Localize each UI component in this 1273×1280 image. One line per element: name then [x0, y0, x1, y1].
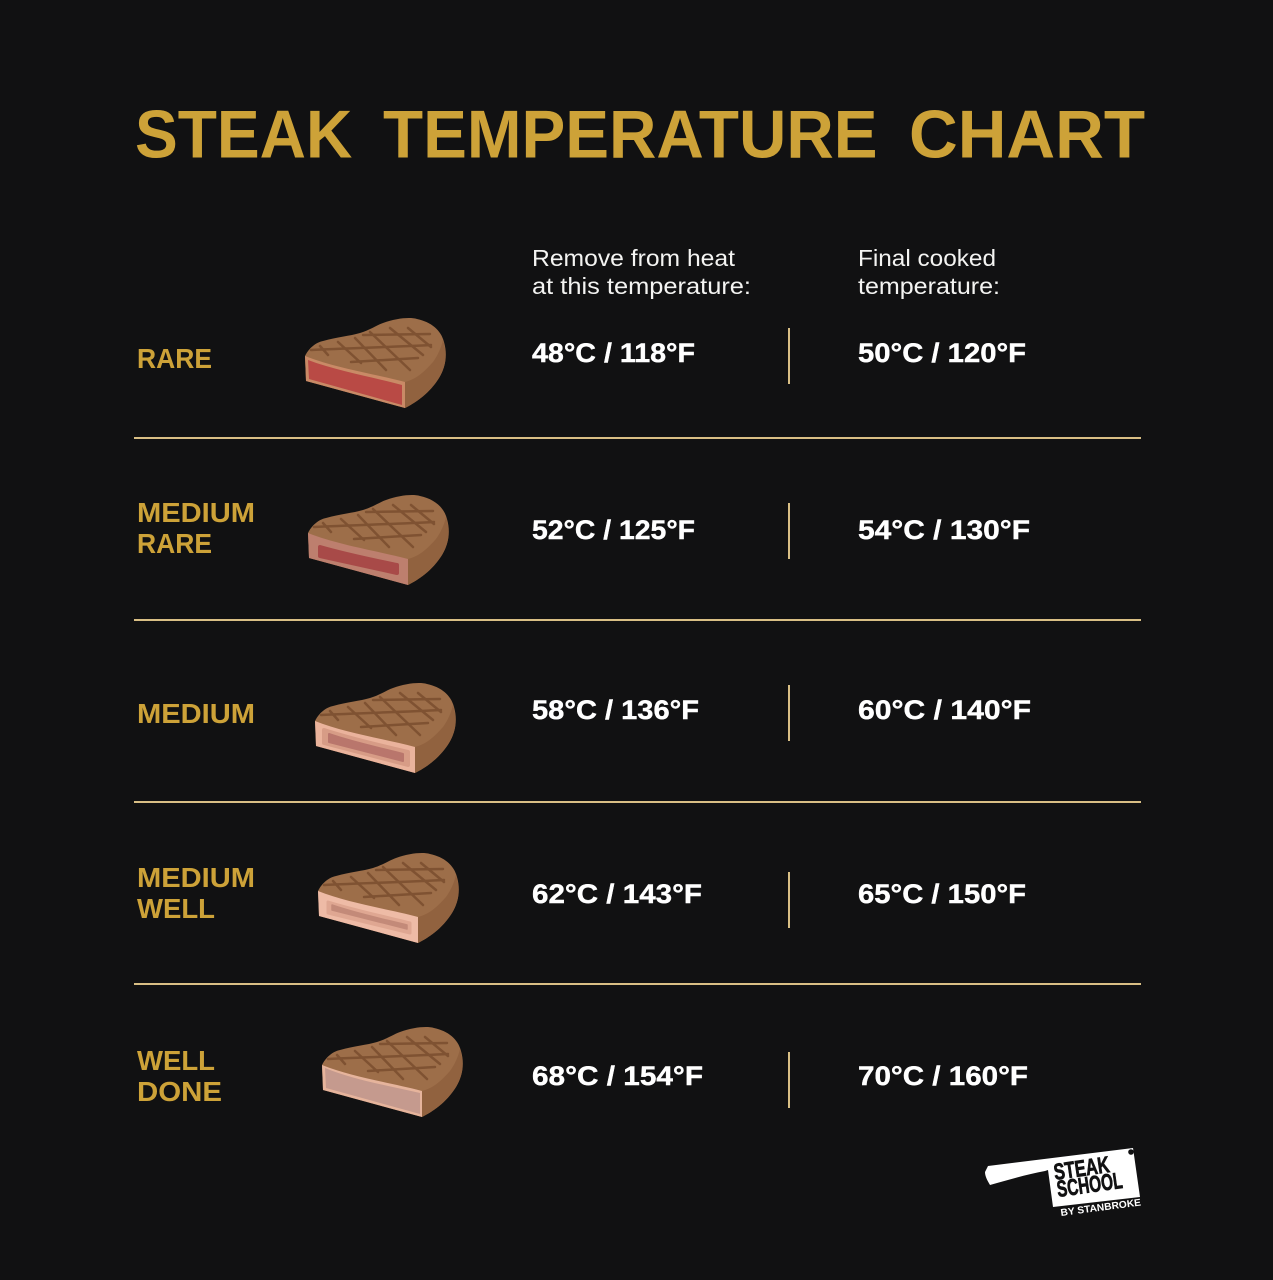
- temperature: final medium rare: 54°C / 130°F: [858, 515, 1030, 545]
- temperature: final medium: 60°C / 140°F: [858, 695, 1031, 725]
- label: medium well: MEDIUM: [137, 862, 255, 893]
- temperature: remove medium rare: 52°C / 125°F: [532, 515, 695, 545]
- label: medium rare: RARE: [137, 528, 212, 559]
- label: medium well: [137, 862, 255, 924]
- column header: final cooked: temperature:: [858, 273, 1000, 299]
- temperature: final well done: 70°C / 160°F: [858, 1061, 1028, 1091]
- row: medium well: [137, 853, 1026, 943]
- temperature: final rare: 50°C / 120°F: [858, 338, 1026, 368]
- label: medium: MEDIUM: [137, 698, 255, 729]
- temperature: remove well done: 68°C / 154°F: [532, 1061, 703, 1091]
- row: rare: [137, 318, 1026, 408]
- logo text: BY STANBROKE: [1060, 1197, 1142, 1219]
- label: medium rare: [137, 497, 255, 559]
- label: well done: WELL: [137, 1045, 215, 1076]
- temperature: remove medium: 58°C / 136°F: [532, 695, 699, 725]
- icon: well done steak: [322, 1027, 463, 1117]
- icon: medium well steak: [318, 853, 459, 943]
- column header: remove from heat: at this temperature:: [532, 273, 751, 299]
- logo text: SCHOOL: [1055, 1167, 1124, 1202]
- column header: final cooked: [858, 245, 1000, 299]
- title: STEAK: [135, 97, 353, 173]
- row: medium: [137, 683, 1031, 773]
- label: well done: [137, 1045, 222, 1107]
- logo text: STEAK: [1052, 1151, 1111, 1185]
- temperature: final medium well: 65°C / 150°F: [858, 879, 1026, 909]
- logo: steak school by stanbroke: [985, 1148, 1142, 1219]
- row: medium rare: [137, 495, 1030, 585]
- icon: medium rare steak: [308, 495, 449, 585]
- icon: rare steak: [305, 318, 446, 408]
- icon: cleaver: [985, 1148, 1140, 1207]
- icon: medium steak: [315, 683, 456, 773]
- title: TEMPERATURE: [383, 97, 878, 173]
- label: medium rare: MEDIUM: [137, 497, 255, 528]
- temperature: remove rare: 48°C / 118°F: [532, 338, 695, 368]
- title: CHART: [909, 97, 1145, 173]
- column header: remove from heat: Remove from heat: [532, 245, 736, 271]
- temperature: remove medium well: 62°C / 143°F: [532, 879, 702, 909]
- title: [135, 97, 1145, 173]
- column header: final cooked: Final cooked: [858, 245, 996, 271]
- label: well done: DONE: [137, 1076, 222, 1107]
- logo text: [1052, 1151, 1142, 1219]
- label: rare: RARE: [137, 343, 212, 374]
- label: medium well: WELL: [137, 893, 215, 924]
- row: well done: [137, 1027, 1028, 1117]
- column header: remove from heat: [532, 245, 751, 299]
